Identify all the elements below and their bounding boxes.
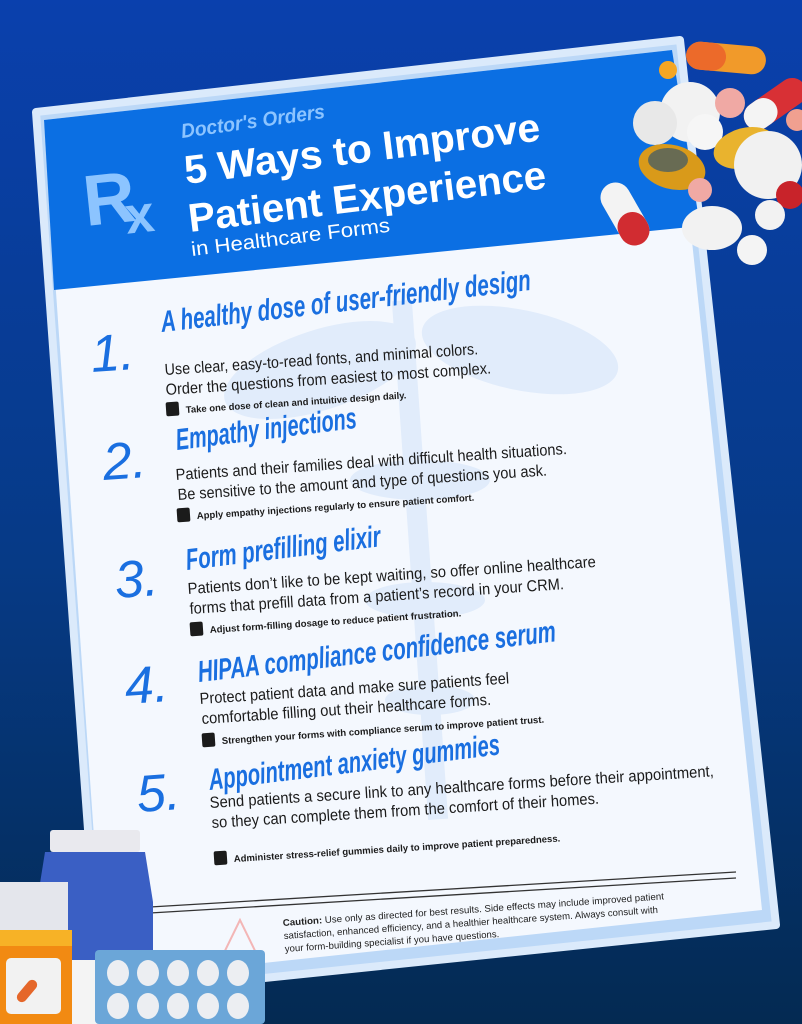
item 4: Strengthen your forms with compliance serum to improve patient trust.: [221, 715, 544, 747]
item 1: Take one dose of clean and intuitive design daily.: [185, 390, 407, 416]
header: subtitle: in Healthcare Forms: [190, 215, 391, 261]
header: title: 5 Ways to Improve: [182, 106, 542, 193]
item 4: HIPAA compliance confidence serum: [196, 615, 557, 689]
item 4: comfortable filling out their healthcare forms.: [201, 692, 492, 728]
caution text: Caution: Use only as directed for best results. Side effects may include improved patient: [282, 891, 665, 929]
item 1: A healthy dose of user-friendly design: [158, 264, 532, 339]
header: title: Patient Experience: [186, 153, 548, 241]
item 1: 1.: [89, 323, 136, 384]
caution text: [282, 891, 665, 955]
item 2: [100, 402, 567, 522]
item 5: so they can complete them from the comfort of their homes.: [211, 791, 599, 832]
item 3: 3.: [113, 549, 160, 610]
header: Rx logo: x: [122, 185, 157, 246]
pills cluster: [595, 41, 802, 265]
watermark: caduceus: [213, 290, 626, 820]
header: kicker: Doctor's Orders: [180, 101, 326, 143]
bottles: [0, 830, 265, 1024]
item 2: Be sensitive to the amount and type of questions you ask.: [177, 463, 547, 504]
header band: [44, 50, 700, 290]
item 3: Form prefilling elixir: [184, 520, 384, 577]
item 1: Order the questions from easiest to most complex.: [165, 360, 492, 399]
item 3: [113, 520, 596, 636]
item 3: Adjust form-filling dosage to reduce patient frustration.: [209, 608, 462, 636]
item 4: Protect patient data and make sure patients feel: [199, 670, 510, 708]
item 4: [123, 615, 557, 747]
caution text: satisfaction, enhanced efficiency, and a healthier healthcare system. Always consult with: [283, 905, 658, 942]
item 2: 2.: [100, 431, 148, 492]
item 5: 5.: [135, 763, 182, 824]
item 1: Use clear, easy-to-read fonts, and minimal colors.: [164, 341, 479, 379]
item 2: Apply empathy injections regularly to ensure patient comfort.: [196, 493, 475, 522]
icon: warning triangle: [218, 920, 262, 965]
item 3: Patients don’t like to be kept waiting, so offer online healthcare: [187, 554, 596, 598]
header: Rx logo: R: [79, 157, 139, 242]
caution text: your form-building specialist if you have questions.: [284, 929, 500, 955]
header: title: [182, 106, 548, 241]
item 3: forms that prefill data from a patient’s record in your CRM.: [189, 576, 564, 618]
item 4: 4.: [123, 655, 170, 716]
item 5: [135, 728, 714, 865]
item 5: Appointment anxiety gummies: [206, 728, 502, 797]
item 5: Administer stress-relief gummies daily to improve patient preparedness.: [233, 833, 561, 865]
item 5: Send patients a secure link to any healthcare forms before their appointment,: [209, 763, 714, 812]
item 2: Empathy injections: [174, 402, 358, 457]
item 2: Patients and their families deal with difficult health situations.: [175, 441, 567, 484]
item 1: [89, 264, 532, 416]
